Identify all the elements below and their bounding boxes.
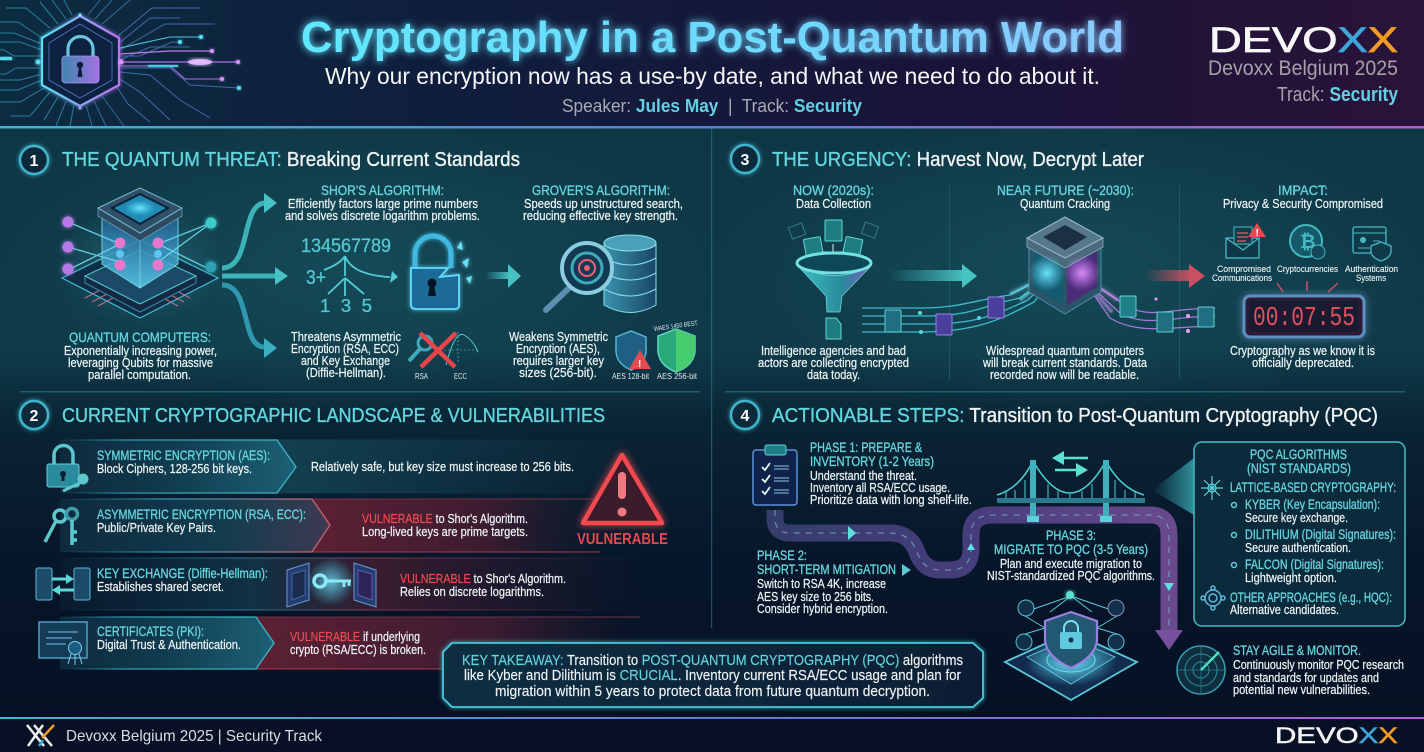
text: threatens asymmetric: and Key Exchange (301, 354, 390, 368)
panel: PQC algorithms: Lightweight option. (1245, 571, 1337, 585)
callout: key takeaway (443, 643, 983, 707)
row: certificates: crypto (RSA/ECC) is broken. (290, 643, 426, 657)
arrow: near future to impact (1145, 264, 1205, 288)
text: Grover's algorithm: reducing effective key strength. (523, 209, 678, 223)
text: Shor's algorithm: SHOR'S ALGORITHM: (321, 182, 444, 198)
panel: PQC algorithms: KYBER (Key Encapsulation): (1245, 496, 1380, 512)
section 3 heading: THE URGENCY: Harvest Now, Decrypt Later (772, 149, 1144, 171)
panel: section 3 the urgency (731, 145, 1398, 382)
text: weakens symmetric: Weakens Symmetric (509, 330, 608, 344)
icon: PQC shield on platform (1005, 591, 1137, 700)
icon: broken padlock (411, 236, 472, 309)
text: phase 2: PHASE 2: (757, 547, 807, 563)
section 2 heading: CURRENT CRYPTOGRAPHIC LANDSCAPE & VULNERABILITIES (62, 405, 605, 427)
title: Cryptography in a Post-Quantum World (301, 13, 1124, 62)
text: weakens symmetric (509, 330, 608, 380)
text: phase 2: Consider hybrid encryption. (757, 602, 888, 616)
icon: radar (1177, 646, 1225, 694)
speaker and track: Speaker: Jules May | Track: Security (562, 95, 863, 116)
panel: PQC algorithms: Secure authentication. (1245, 541, 1351, 555)
icon: authentication systems (1353, 227, 1391, 261)
text: intelligence agencies: Intelligence agencies and bad (761, 344, 906, 358)
text: phase 1: Inventory all RSA/ECC usage. (810, 481, 950, 495)
Devoxx logo and event info: DEVO XX (1209, 21, 1398, 60)
text: now data collection: Data Collection (796, 197, 871, 211)
panel: section 1 the quantum threat (20, 146, 698, 382)
text: Grover's algorithm: GROVER'S ALGORITHM: (532, 182, 670, 198)
text: phase 2: AES key size to 256 bits. (757, 590, 874, 604)
icon: quantum computer (55, 188, 225, 325)
text: stay agile and monitor: STAY AGILE & MONITOR. (1233, 642, 1361, 658)
icon: Devoxx X mark (27, 725, 54, 746)
icon: database with magnifier (546, 235, 656, 312)
text: near future quantum cracking: Quantum Cracking (1020, 197, 1110, 211)
icon: cryptocurrency coins (1290, 225, 1325, 259)
icon: other approaches gear (1201, 586, 1225, 610)
text: intelligence agencies: actors are collecting encrypted (758, 356, 909, 370)
panel: PQC algorithms: (NIST STANDARDS) (1247, 460, 1351, 476)
icon: clipboard checklist (753, 445, 797, 505)
text: Shor's algorithm: Efficiently factors large prime numbers (288, 197, 478, 211)
Devoxx logo and event info (1208, 21, 1399, 106)
row: key exchange: Relies on discrete logarithms. (400, 585, 544, 599)
text: stay agile and monitor (1233, 642, 1404, 697)
row: key exchange: VULNERABLE to Shor's Algorithm. (400, 572, 566, 586)
row: key exchange (36, 558, 640, 610)
Devoxx logo and event info: Track: Security (1277, 84, 1399, 106)
text: threatens asymmetric: Encryption (RSA, ECC) (291, 342, 399, 356)
text: Grover's algorithm: Speeds up unstructured search, (524, 197, 683, 211)
arrow: now to near future (890, 264, 977, 288)
footer text: Devoxx Belgium 2025 | Security Track (66, 728, 323, 745)
text: impact icon labels: Compromised (1217, 264, 1271, 275)
chart: factorisation tree (301, 236, 398, 316)
row: asymmetric encryption: Public/Private Key Pairs. (97, 521, 216, 535)
icon: crossed out RSA and ECC: ECC (454, 372, 467, 381)
data stream flowing through the quantum computer (862, 276, 1215, 334)
section 1 heading: THE QUANTUM THREAT: Breaking Current Standards (62, 149, 520, 171)
panel: PQC algorithms: Secure key exchange. (1245, 511, 1348, 525)
text: phase 2: Switch to RSA 4K, increase (757, 577, 886, 591)
icon: compromised communications: ! (1256, 228, 1259, 239)
arrows: from quantum computers to algorithms (222, 193, 288, 358)
row: key exchange: KEY EXCHANGE (Diffie-Hellman): (97, 565, 268, 581)
row: asymmetric encryption (45, 499, 600, 552)
text: phase 1 (810, 439, 972, 507)
icon: vulnerable warning triangle: VULNERABLE (577, 531, 668, 548)
chart: factorisation tree: 1 3 5 (320, 296, 372, 316)
icon: data funnel (788, 220, 879, 339)
icon: two devices exchanging (36, 568, 90, 600)
panel: section 2 cryptographic landscape (20, 401, 668, 669)
text: now data collection (793, 182, 874, 211)
callout: key takeaway: like Kyber and Dilithium is CRUCIAL. Inventory current RSA/ECC usage and plan for (464, 667, 961, 684)
icon: AES shields: AES 128-bit (612, 372, 650, 381)
Devoxx logo and event info: Devoxx Belgium 2025 (1208, 57, 1398, 80)
text: widespread quantum computers: will break current standards. Data (982, 356, 1147, 370)
icon: crossed out RSA and ECC: RSA (415, 372, 429, 381)
icon: key pair (45, 508, 78, 545)
icon: AES shields: ! (638, 359, 641, 370)
text: phase 1: Understand the threat. (810, 469, 917, 483)
icon: AES shields (612, 320, 698, 381)
row: asymmetric encryption: ASYMMETRIC ENCRYPTION (RSA, ECC): (97, 506, 306, 522)
icon: cryptocurrency coins: ₿ (1300, 232, 1315, 253)
row: symmetric encryption: SYMMETRIC ENCRYPTION (AES): (97, 447, 270, 463)
section 1 heading: 1 (30, 153, 38, 170)
text: Shor's algorithm (285, 182, 480, 223)
text: threatens asymmetric (291, 330, 401, 380)
countdown timer (1244, 281, 1364, 337)
text: Grover's algorithm (523, 182, 683, 223)
row: certificates: CERTIFICATES (PKI): (97, 623, 204, 639)
icon: AES shields: WAES 1450 BEST (654, 320, 698, 333)
text: widespread quantum computers (982, 344, 1147, 382)
panel: PQC algorithms (1152, 442, 1405, 626)
row: symmetric encryption: Relatively safe, but key size must increase to 256 bits. (311, 460, 574, 474)
chart: factorisation tree: 3+ (306, 267, 326, 289)
chart: factorisation tree: 134567789 (301, 236, 391, 257)
panel: PQC algorithms: PQC ALGORITHMS (1250, 446, 1347, 462)
icon: AES shields: AES 256-bit (657, 372, 698, 381)
icon: key between tablets (287, 558, 376, 607)
text: impact: Privacy & Security Compromised (1223, 197, 1383, 211)
text: stay agile and monitor: and standards for updates and (1233, 671, 1379, 685)
icon: certificate (39, 622, 87, 665)
text: phase 1: Prioritize data with long shelf-life. (810, 493, 972, 507)
row: certificates (39, 617, 640, 669)
text: widespread quantum computers: recorded now will be readable. (990, 368, 1139, 382)
text: cryptography deprecated (1230, 344, 1375, 370)
text: intelligence agencies: data today. (807, 368, 860, 382)
text: phase 1: INVENTORY (1-2 Years) (810, 453, 934, 469)
text: phase 2 (757, 547, 911, 616)
text: quantum computers: Exponentially increasing power, (64, 344, 217, 358)
text: quantum computers: parallel computation. (88, 368, 191, 382)
text: now data collection: NOW (2020s): (793, 182, 874, 198)
text: impact icon labels: Cryptocurrencies (1277, 264, 1338, 275)
icon: suspension bridge (997, 451, 1145, 522)
text: intelligence agencies (758, 344, 909, 382)
text: cryptography deprecated: Cryptography as we know it is (1230, 344, 1375, 358)
section 3 heading (731, 145, 1144, 173)
text: quantum computers (64, 329, 217, 382)
text: widespread quantum computers: Widespread quantum computers (986, 344, 1144, 358)
text: impact icon labels: Authentication (1345, 264, 1398, 275)
row: certificates: Digital Trust & Authentication. (97, 638, 241, 652)
text: phase 2: SHORT-TERM MITIGATION (757, 561, 896, 577)
callout: key takeaway: migration within 5 years to protect data from future quantum decryption. (495, 683, 930, 700)
text: impact icon labels (1212, 264, 1398, 284)
icon: quantum cracking cube (1027, 217, 1103, 314)
row: certificates: VULNERABLE if underlying (290, 630, 420, 644)
text: phase 3: PHASE 3: (1046, 527, 1096, 543)
icon: compromised communications (1226, 223, 1266, 258)
text: quantum computers: QUANTUM COMPUTERS: (69, 329, 211, 345)
text: weakens symmetric: requires larger key (513, 354, 605, 368)
text: phase 3: MIGRATE TO PQC (3-5 Years) (994, 541, 1148, 557)
text: phase 3: NIST-standardized PQC algorithms. (987, 569, 1155, 583)
panel: PQC algorithms: FALCON (Digital Signatures): (1245, 556, 1384, 572)
section 3 heading: 3 (740, 152, 750, 169)
icon: padlock and key (47, 446, 88, 491)
arrow: lock to Grover (485, 264, 521, 288)
header: lock emblem with circuit traces (0, 0, 241, 126)
row: key exchange: Establishes shared secret. (97, 580, 224, 594)
text: cryptography deprecated: officially deprecated. (1252, 356, 1354, 370)
section 2 heading (20, 401, 605, 429)
text: phase 3: Plan and execute migration to (1000, 557, 1142, 571)
text: threatens asymmetric: Threatens Asymmetric (291, 330, 401, 344)
text: impact (1223, 182, 1383, 211)
text: near future quantum cracking: NEAR FUTURE (~2030): (997, 182, 1134, 198)
row: asymmetric encryption: Long-lived keys are prime targets. (362, 525, 528, 539)
text: impact icon labels: Systems (1356, 273, 1386, 284)
text: impact icon labels: Communications (1212, 273, 1272, 284)
text: near future quantum cracking (997, 182, 1134, 211)
icon: lattice (1201, 476, 1223, 500)
footer Devoxx logo: DEVO XX (1275, 723, 1398, 748)
text: Shor's algorithm: and solves discrete logarithm problems. (285, 209, 480, 223)
section 4 heading: 4 (740, 408, 750, 425)
text: weakens symmetric: sizes (256-bit). (519, 366, 597, 380)
countdown timer: 00:07:55 (1253, 304, 1355, 334)
row: asymmetric encryption: VULNERABLE to Shor's Algorithm. (362, 512, 528, 526)
text: quantum computers: leveraging Qubits for massive (68, 356, 213, 370)
roadmap path with arrow (775, 510, 1183, 650)
row: symmetric encryption: Block Ciphers, 128-256 bit keys. (97, 462, 252, 476)
text: stay agile and monitor: potential new vulnerabilities. (1233, 683, 1370, 697)
documents in stream (885, 296, 1214, 335)
text: phase 1: PHASE 1: PREPARE & (810, 439, 923, 455)
panel: section 4 actionable steps (731, 401, 1405, 700)
section 2 heading: 2 (30, 408, 38, 425)
row: symmetric encryption (47, 440, 637, 493)
callout: key takeaway: KEY TAKEAWAY: Transition to POST-QUANTUM CRYPTOGRAPHY (PQC) algorithms (462, 652, 963, 669)
text: threatens asymmetric: (Diffie-Hellman). (306, 366, 386, 380)
text: phase 3 (987, 527, 1155, 583)
panel: PQC algorithms: Alternative candidates. (1230, 603, 1339, 617)
subtitle: Why our encryption now has a use-by date, and what we need to do about it. (325, 63, 1100, 89)
text: impact: IMPACT: (1278, 182, 1328, 198)
section 4 heading: ACTIONABLE STEPS: Transition to Post-Quantum Cryptography (PQC) (772, 405, 1378, 427)
icon: crossed out RSA and ECC (409, 332, 478, 381)
footer (27, 723, 1398, 748)
text: weakens symmetric: Encryption (AES), (516, 342, 600, 356)
icon: vulnerable warning triangle (577, 455, 668, 548)
